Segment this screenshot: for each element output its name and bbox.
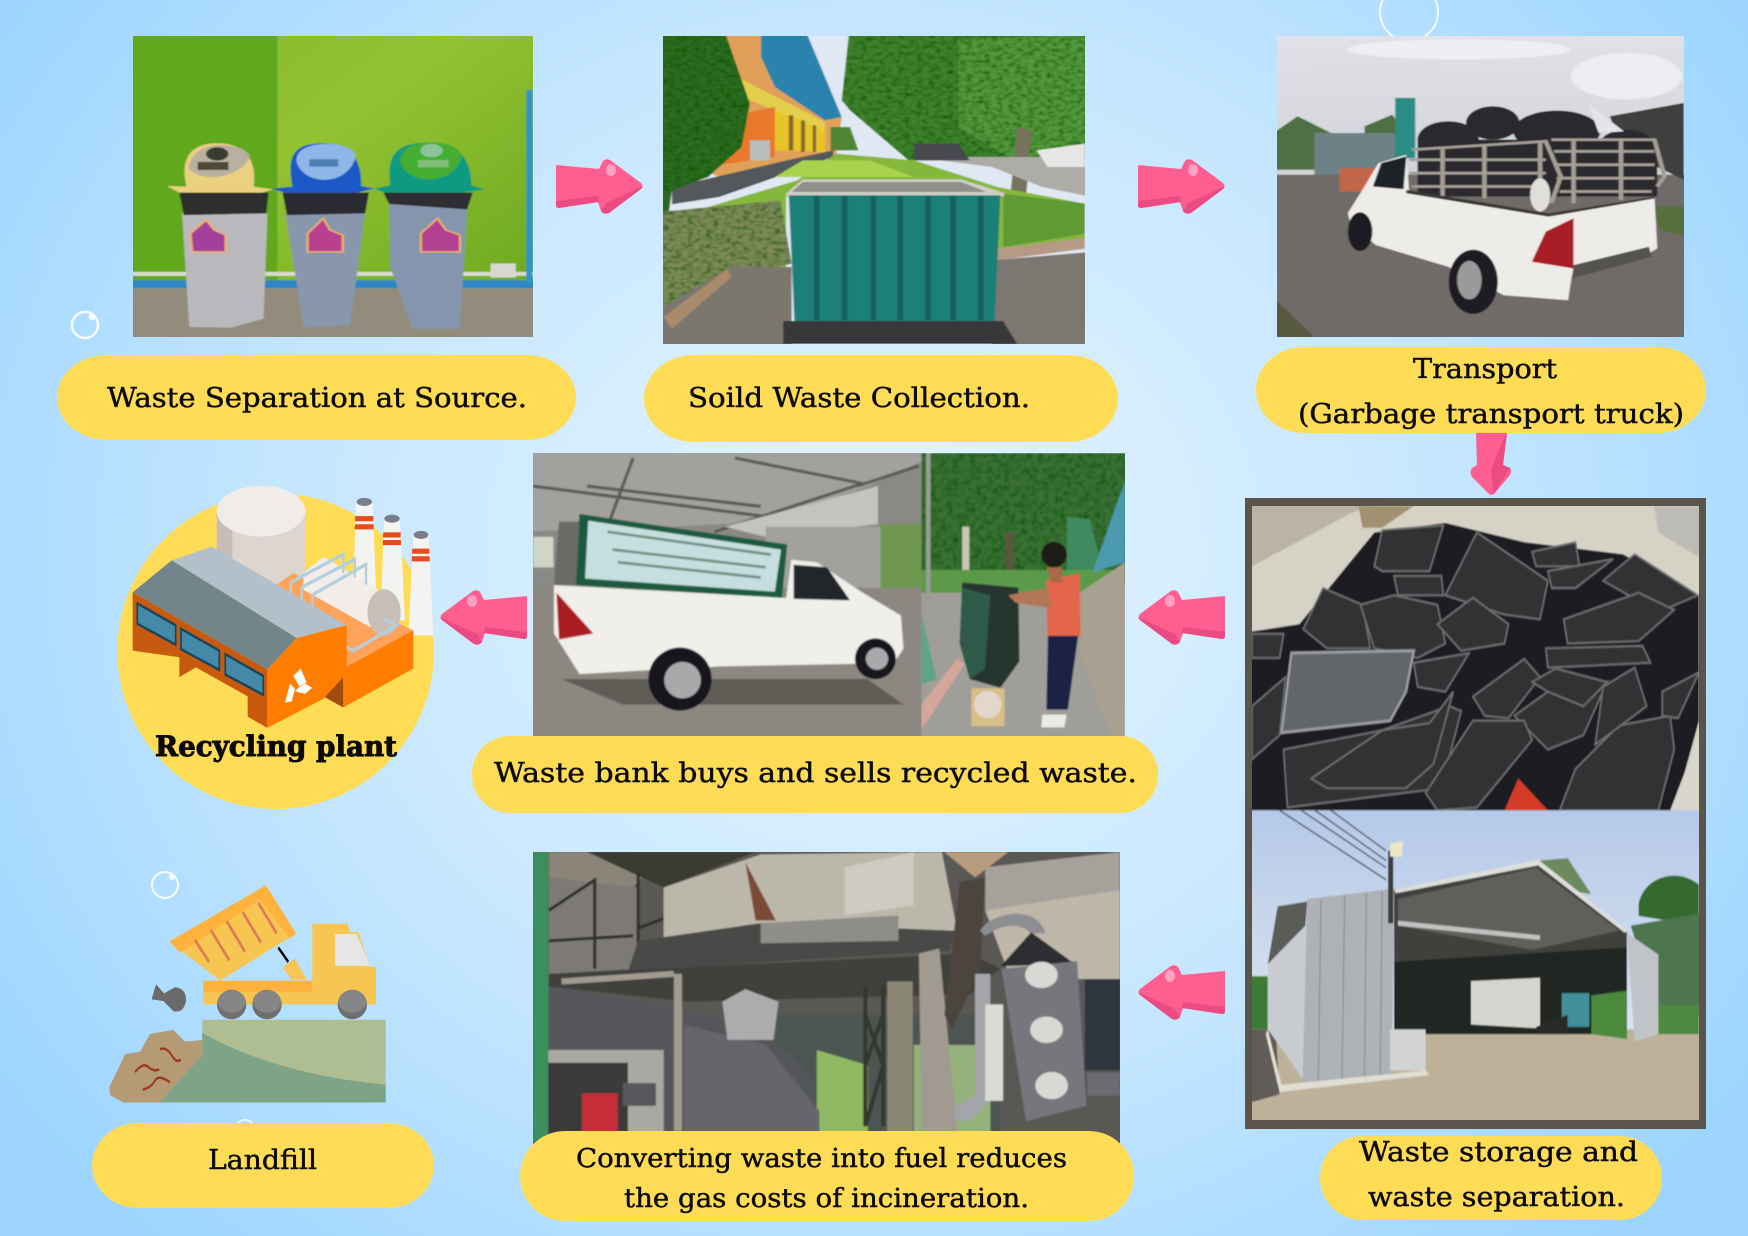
right arrow: separation to collection — [556, 159, 642, 214]
photo: waste bank pickup truck and worker weighing a bag — [516, 440, 1131, 755]
decorative bubble: upper left — [72, 312, 98, 338]
dump truck — [169, 885, 376, 1019]
label pill: transport: (Garbage transport truck) — [1298, 399, 1684, 430]
landfill illustration with dump truck — [109, 885, 386, 1102]
three chimneys — [353, 498, 433, 635]
photo part: sorting shed and yard — [1236, 810, 1714, 1135]
recycling plant label: Recycling plant — [155, 730, 397, 763]
left arrow: storage to incineration — [1138, 965, 1225, 1020]
label pill: waste storage and separation: waste separation. — [1368, 1182, 1625, 1213]
ground mound — [109, 1020, 386, 1102]
annex roof and cylinder — [277, 554, 413, 708]
factory building — [133, 547, 347, 728]
photo: white pickup truck carrying black garbage bags — [1259, 23, 1705, 350]
decorative bubble: above landfill label — [235, 1120, 255, 1140]
label pill: waste storage and separation: Waste storage and — [1359, 1137, 1638, 1168]
photo: three waste separation bins against a green wall — [111, 23, 558, 355]
right arrow: collection to transport — [1138, 159, 1224, 214]
label pill: waste bank: Waste bank buys and sells recycled waste. — [494, 758, 1137, 789]
label pill: landfill: Landfill — [208, 1145, 317, 1176]
label pill: transport — [1256, 347, 1706, 433]
label pill: converting waste into fuel: the gas costs of incineration. — [624, 1184, 1029, 1214]
label pill: waste bank — [472, 736, 1158, 813]
photo frame: waste storage trays and sorting shed — [1236, 489, 1714, 1135]
storage tank — [217, 486, 306, 592]
label pill: landfill — [92, 1123, 434, 1208]
photo: waste-to-fuel incineration machinery — [516, 837, 1138, 1162]
photo: green metal collection container on campus — [641, 24, 1109, 357]
label pill: converting waste into fuel — [520, 1131, 1134, 1221]
label pill: waste storage and separation — [1320, 1136, 1662, 1220]
label pill: converting waste into fuel: Converting waste into fuel reduces — [576, 1144, 1067, 1174]
decorative bubble: top centre right — [1380, 0, 1438, 41]
left arrow: waste bank to recycling plant — [440, 590, 527, 645]
label pill: waste separation at source: Waste Separation at Source. — [107, 383, 527, 414]
photo part: black plastic food trays — [1236, 489, 1714, 812]
label pill: waste separation at source — [57, 355, 576, 440]
label pill: solid waste collection: Soild Waste Collection. — [688, 383, 1030, 414]
label pill: transport: Transport — [1413, 354, 1557, 385]
label pill: solid waste collection — [644, 355, 1118, 442]
recycling plant illustration in a yellow circle — [117, 486, 434, 809]
garbage bag — [152, 984, 186, 1012]
decorative bubble: above landfill truck — [152, 872, 178, 898]
down arrow: transport to storage — [1470, 433, 1511, 495]
yellow circle backdrop — [117, 493, 434, 809]
left arrow: storage to waste bank — [1138, 590, 1225, 645]
